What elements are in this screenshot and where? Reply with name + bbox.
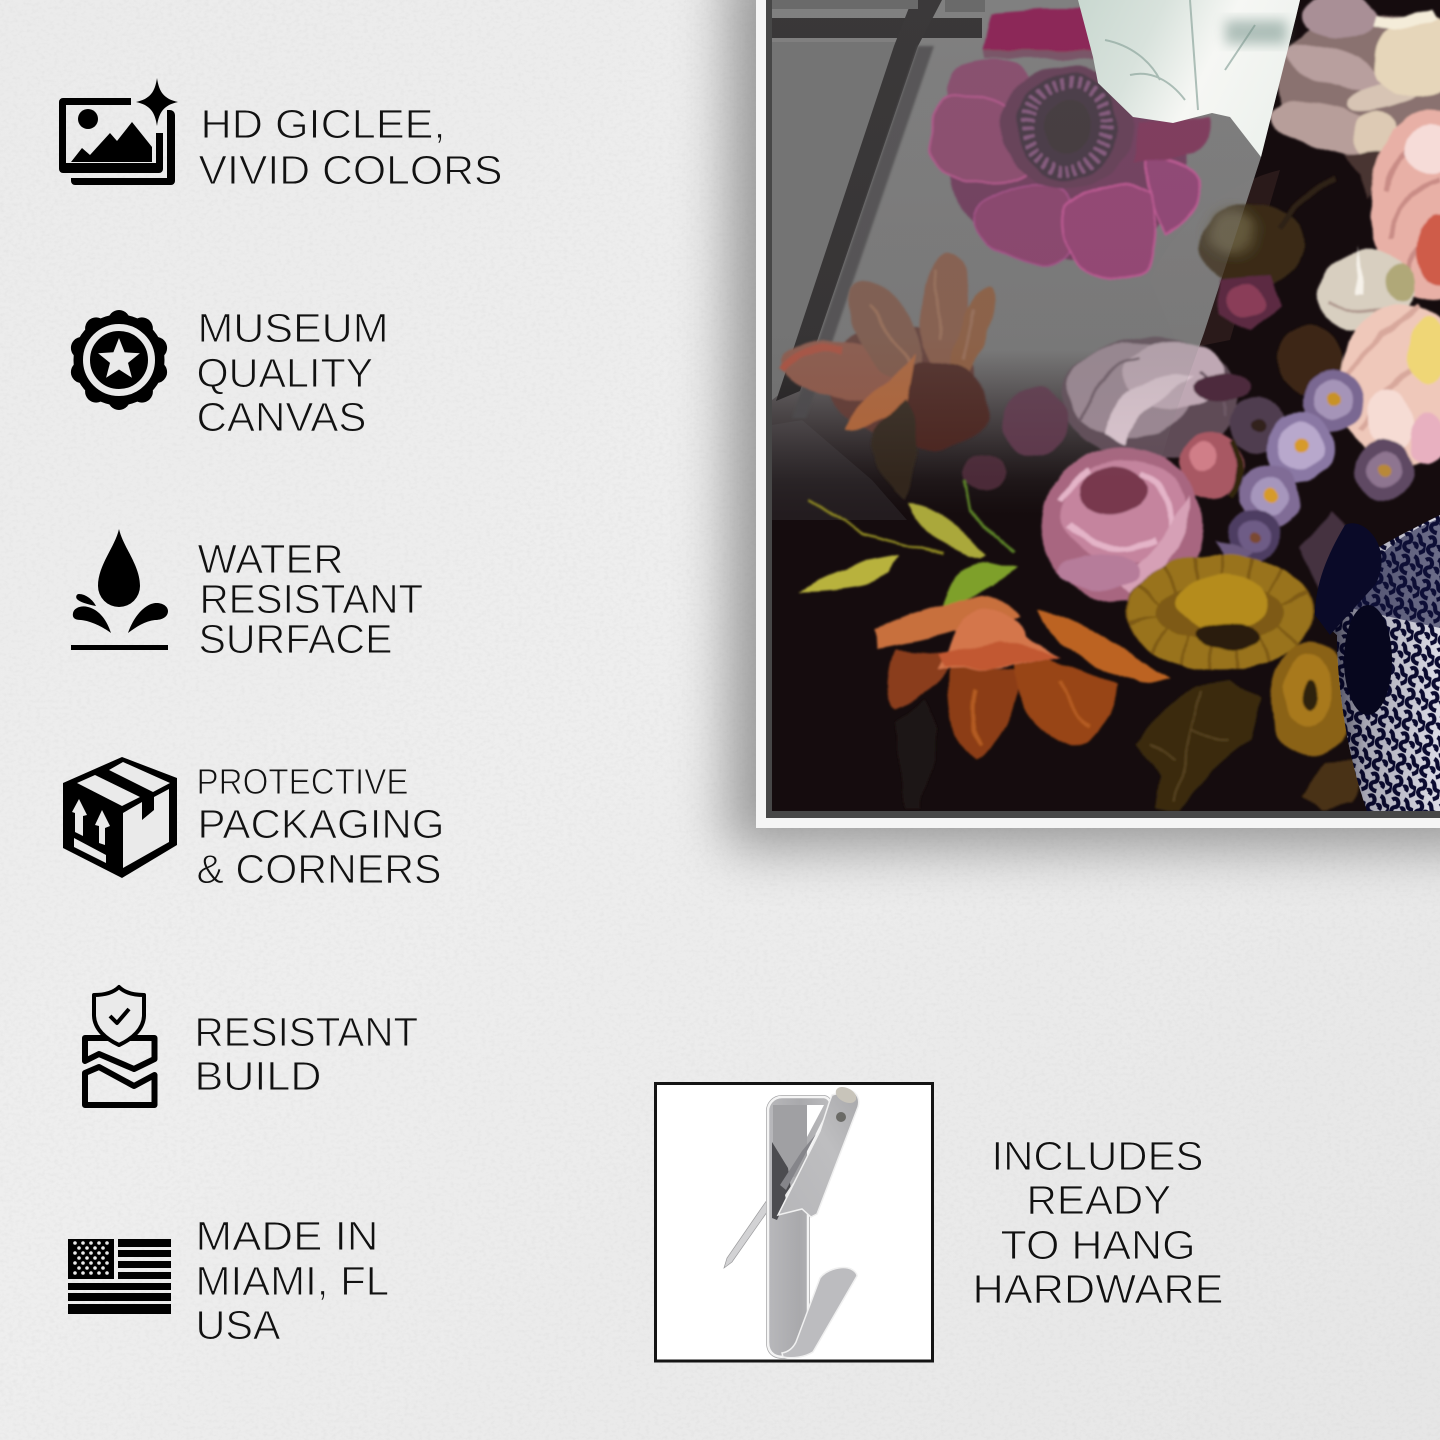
flower: sunflowers — [1126, 554, 1350, 758]
text: water resistant: WATER — [198, 536, 344, 582]
flowers: purple daisies — [1215, 369, 1415, 610]
flower: orange lily — [776, 250, 1004, 500]
icon: steel hook — [724, 1084, 859, 1358]
feature: protective packaging — [63, 757, 456, 892]
flower: yellow and pink peony — [1278, 305, 1440, 465]
icon: shield over cracked block — [85, 987, 154, 1105]
dark leaf behind bud — [1150, 170, 1280, 350]
reflected window panes and bars — [772, 0, 985, 418]
feature: museum quality — [71, 305, 400, 440]
hook photo box — [656, 1084, 932, 1361]
feature: resistant build — [85, 987, 429, 1105]
leaves: dark brown — [895, 680, 1368, 810]
text: resistant build: BUILD — [194, 1053, 322, 1099]
white frame — [756, 0, 1440, 828]
icon: package box — [63, 757, 177, 878]
text: water resistant: SURFACE — [198, 616, 392, 662]
flower: cream peony — [1265, 0, 1440, 200]
icon: American flag — [68, 1239, 171, 1314]
text: protective packaging: & CORNERS — [196, 846, 442, 892]
text: protective packaging: PACKAGING — [198, 801, 444, 847]
hook back strip — [768, 1097, 831, 1357]
text: museum quality: MUSEUM — [198, 305, 388, 351]
icon: water drop — [71, 529, 168, 650]
frame shadow — [728, 0, 1440, 848]
text: ready to hang hardware: HARDWARE — [972, 1266, 1224, 1312]
panel: hanging hardware — [656, 1084, 1224, 1361]
hook lip — [782, 1267, 857, 1358]
flower: pale grey peony — [1002, 336, 1250, 460]
text: HD giclee: VIVID COLORS — [198, 147, 503, 193]
fog of reflection over flowers — [772, 0, 1300, 480]
feature: made in Miami — [68, 1213, 399, 1348]
nail — [724, 1200, 772, 1268]
icon: photo stack with sparkle — [59, 78, 178, 185]
hook back strip outline — [768, 1097, 831, 1357]
pin head — [833, 1084, 859, 1106]
flower: pink rose — [1369, 110, 1440, 300]
text: museum quality: QUALITY — [196, 350, 373, 396]
table edge — [772, 420, 907, 520]
leaves: yellow green — [800, 480, 1017, 606]
text: ready to hang hardware: READY — [1026, 1177, 1171, 1223]
painting canvas — [772, 0, 1440, 811]
feature: HD giclee — [59, 78, 503, 193]
text: ready to hang hardware: TO HANG — [1000, 1222, 1196, 1268]
flower: olive bud — [1200, 180, 1335, 330]
flower: magenta anemone — [930, 10, 1210, 278]
icon: star badge — [71, 310, 167, 410]
text: museum quality: CANVAS — [196, 394, 366, 440]
text: made in Miami: MIAMI, FL — [196, 1258, 388, 1304]
glass reflection — [772, 0, 1300, 515]
text: made in Miami: USA — [196, 1302, 281, 1348]
flower: small pink bud — [1179, 433, 1245, 499]
flower: orange tulip — [873, 597, 1170, 760]
panel: framed floral painting — [728, 0, 1440, 848]
text: made in Miami: MADE IN — [196, 1213, 378, 1259]
hook front plate — [778, 1090, 859, 1217]
white leaf reflection — [1078, 0, 1300, 157]
vase: blue and white porcelain — [1315, 515, 1440, 811]
text: ready to hang hardware: INCLUDES — [992, 1133, 1204, 1179]
painted flowers — [776, 0, 1440, 810]
feature: water resistant — [71, 529, 434, 662]
text: HD giclee: HD GICLEE, — [200, 101, 446, 147]
text: resistant build: RESISTANT — [194, 1009, 418, 1055]
flower: large pink rose — [963, 447, 1202, 603]
text: water resistant: RESISTANT — [200, 576, 423, 622]
flower: white bud — [1311, 242, 1421, 340]
text: protective packaging: PROTECTIVE — [196, 761, 408, 802]
